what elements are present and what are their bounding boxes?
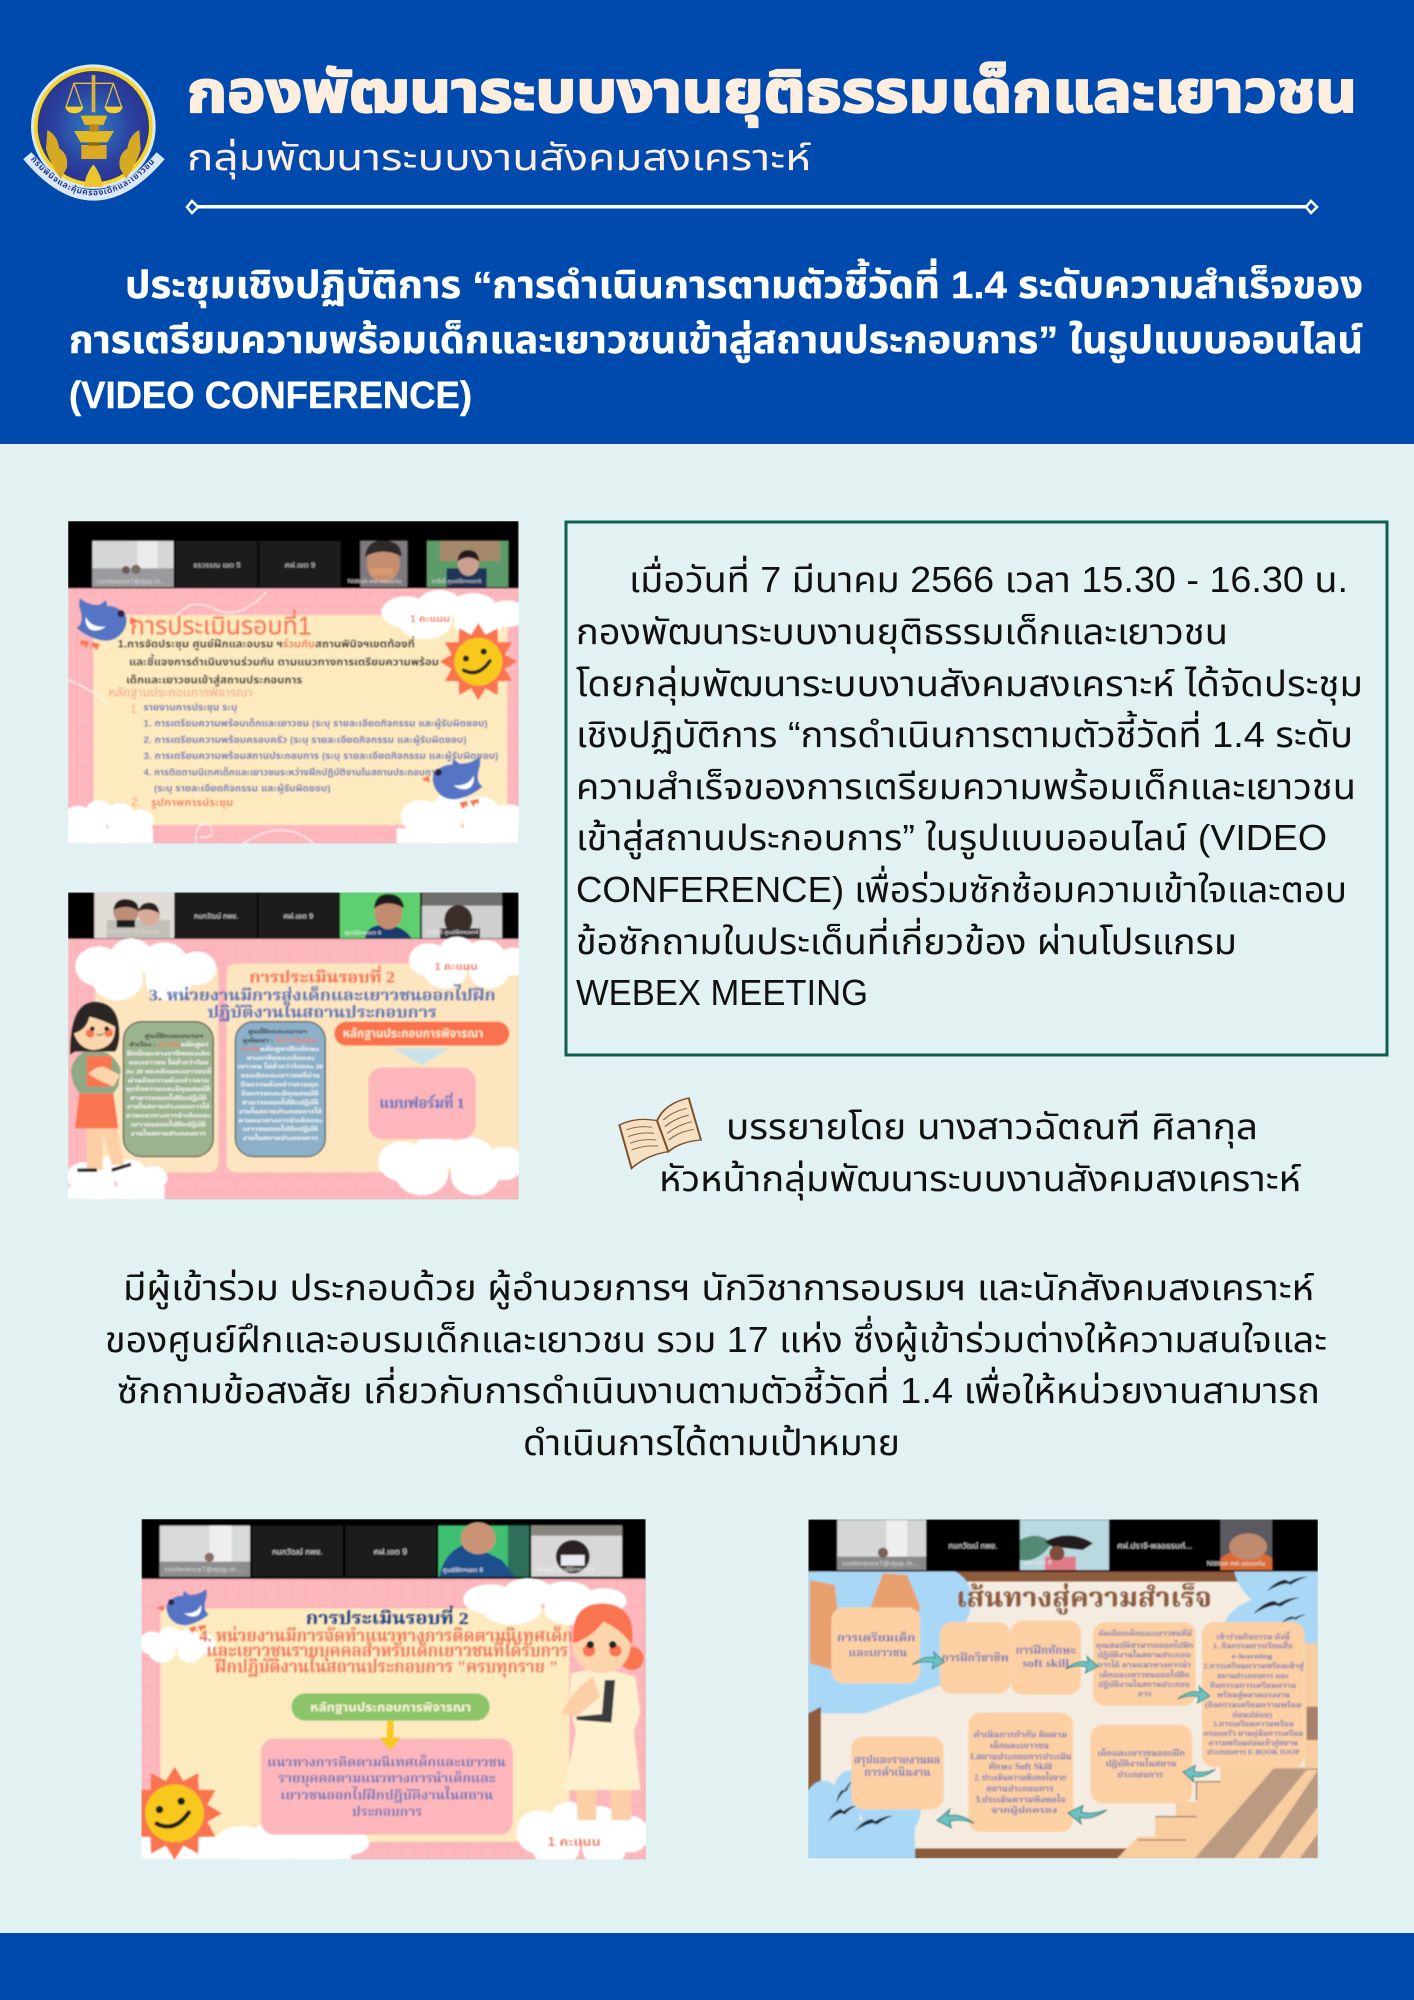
green criteria box bbox=[123, 1022, 213, 1157]
pink guidance box: เยาวชนออกไปฝึกปฏิบัติงานในสถาน bbox=[280, 1784, 493, 1803]
meeting heading: การเตรียมความพร้อมเด็กและเยาวชนเข้าสู่สถานประกอบการ” ในรูปแบบออนไลน์ bbox=[69, 320, 1363, 363]
screenshot: road to success: 3.การเตรียมความพร้อม bbox=[1213, 1720, 1294, 1729]
pink guidance box: แนวทางการติดตามนิเทศเด็กและเยาวชน bbox=[267, 1754, 506, 1770]
slide heading: การประเมินรอบที่ 2 bbox=[306, 1605, 469, 1628]
screenshot: road to success: ก่อนปล่อย) bbox=[1232, 1710, 1273, 1719]
box: meeting description bbox=[566, 522, 1387, 1055]
clouds bbox=[139, 1578, 649, 1869]
green criteria box: ผ่านกิจกรรมดังกล่าวครบ bbox=[128, 1076, 209, 1084]
pink guidance box: รายบุคคลตามแนวทางการนำเด็กและ bbox=[278, 1770, 496, 1787]
slide heading: ปฏิบัติงานในสถานประกอบการ bbox=[207, 1002, 437, 1022]
icon: department seal logo: กรมพินิจและคุ้มครองเด็กและเยาวชน bbox=[30, 157, 154, 196]
screenshot: road to success: เด็กและเยาวชนออกฝึก bbox=[1097, 1748, 1185, 1758]
blue criteria box bbox=[235, 1022, 325, 1157]
green criteria box: ตามแนวทางการนำเด็กและ bbox=[126, 1113, 211, 1120]
blue criteria box: เยาวชนออกไปฝึกปฏิบัติ bbox=[243, 1126, 318, 1133]
screenshot: road to success: 1.สถานประกอบการประเมิน bbox=[970, 1751, 1072, 1761]
video call strip: ศูนย์ฝึกฯเขต 6 bbox=[443, 1567, 484, 1574]
green criteria box: สามารถออกไปฝึกปฏิบัติ bbox=[130, 1095, 207, 1102]
screenshot: road to success: ความพร้อมก่อนเข้าสู่สถาน bbox=[1208, 1739, 1299, 1748]
screenshot: assessment round 2 item 3: 1 คะแนน bbox=[434, 961, 478, 973]
blue criteria box: ทางอาชีพของเด็กและ bbox=[247, 1055, 315, 1062]
green criteria box: งานในสถานประกอบการได้ bbox=[127, 1104, 210, 1111]
participants paragraph: มีผู้เข้าร่วม ประกอบด้วย ผู้อำนวยการฯ นักวิชาการอบรมฯ และนักสังคมสงเคราะห์ bbox=[123, 1267, 1315, 1309]
blue criteria box: ศูนย์ฝึกและอบรมฯ bbox=[248, 1027, 307, 1035]
participants paragraph: ของศูนย์ฝึกและอบรมเด็กและเยาวชน รวม 17 แห่ง ซึ่งผู้เข้าร่วมต่างให้ความสนใจและ bbox=[105, 1315, 1327, 1361]
screenshot: road to success: ดำเนินการกำกับ ติดตาม bbox=[974, 1729, 1067, 1739]
step boxes bbox=[831, 1607, 1305, 1832]
screenshot: road to success: 2.การเตรียมความพร้อมเข้าสู่ bbox=[1203, 1662, 1304, 1671]
meeting heading: (VIDEO CONFERENCE) bbox=[69, 375, 472, 417]
video call strip: ศฝ.ปราจี-พลอธรมก์... bbox=[1117, 1542, 1192, 1551]
slide heading: 3. หน่วยงานมีการส่งเด็กและเยาวชนออกไปฝึก bbox=[149, 985, 496, 1005]
screenshot: assessment round 1: ร่วมกับ bbox=[283, 637, 315, 650]
illustration: girl with book bbox=[70, 1002, 131, 1172]
screenshot: road to success: 1. กิจกรรมการเรียนสื่อ bbox=[1213, 1640, 1293, 1651]
slide background bbox=[68, 939, 519, 1199]
screenshot: road to success: 3.ประเมินความพึงพอใจ bbox=[975, 1793, 1066, 1804]
video call strip: กนกวัฒน์ กพย. bbox=[194, 912, 238, 921]
screenshot: road to success: จากผู้ปกครอง bbox=[991, 1805, 1057, 1816]
step labels: และเยาวชน bbox=[849, 1646, 907, 1660]
speaker credit bbox=[659, 1106, 1302, 1200]
form box: แบบฟอร์มที่ 1 bbox=[379, 1092, 464, 1112]
screenshot: assessment round 2 item 4: 1 คะแนน bbox=[547, 1834, 601, 1849]
box: meeting description: ข้อซักถามในประเด็นที่เกี่ยวข้อง ผ่านโปรแกรม bbox=[576, 917, 1237, 962]
blue criteria box: งานในสถานประกอบการ bbox=[243, 1135, 318, 1142]
illustration: girl with tablet bbox=[561, 1603, 644, 1820]
screenshot: assessment round 1: 4. การติดตามนิเทศเด็กและเยาวชนระหว่างฝึกปฏิบัติงานในสถานประกอบการ bbox=[143, 766, 440, 777]
screenshot: road to success: การ bbox=[1138, 1690, 1152, 1699]
screenshot: road to success: ปฏิบัติงานในสถาน bbox=[1105, 1758, 1177, 1769]
meeting heading: ประชุมเชิงปฏิบัติการ “การดำเนินการตามตัวชี้วัดที่ 1.4 ระดับความสำเร็จของ bbox=[125, 258, 1363, 308]
evidence pill bbox=[292, 1693, 490, 1721]
slide background bbox=[141, 1579, 646, 1859]
screenshot: assessment round 1 bbox=[63, 521, 527, 845]
slide heading bbox=[199, 1605, 573, 1679]
green criteria box: เยาวชนออกไปฝึกปฏิบัติ bbox=[131, 1122, 206, 1129]
evidence pill: หลักฐานประกอบการพิจารณา bbox=[310, 1699, 471, 1714]
birds silhouettes bbox=[828, 1577, 1308, 1832]
box: meeting description: โดยกลุ่มพัฒนาระบบงานสังคมสงเคราะห์ ได้จัดประชุม bbox=[576, 663, 1363, 705]
green criteria box: หลักสูตร bbox=[181, 1042, 209, 1049]
video call strip: Nitittun ศฝ.ขอนแก่น bbox=[1207, 1558, 1266, 1567]
screenshot: road to success: การได้ ตามแนวทางการนำ bbox=[1097, 1661, 1191, 1670]
meeting heading bbox=[69, 258, 1363, 417]
step labels: การฝึกทักษะ bbox=[1016, 1643, 1076, 1657]
blue criteria box: ตามแนวทางการนำเด็กและ bbox=[238, 1117, 322, 1124]
icon: bird left bbox=[77, 598, 138, 651]
step labels bbox=[837, 1631, 1076, 1779]
blue criteria box: ไม่จำเป็นต้อง bbox=[275, 1036, 318, 1044]
icon: bird bbox=[157, 1589, 209, 1634]
screenshot: road to success: ทักษะ Soft Skill bbox=[988, 1762, 1053, 1772]
screenshot: assessment round 1: 1.การจัดประชุม ศูนย์ฝึกและอบรม ฯ bbox=[118, 638, 283, 650]
step labels: การดำเนินงาน bbox=[864, 1765, 931, 1779]
screenshot: assessment round 1: 1. bbox=[131, 702, 138, 716]
green criteria box: ลำเรือง : bbox=[129, 1042, 155, 1049]
slide heading: และเยาวชนรายบุคคลสำหรับเด็กเยาวชนที่ได้รับการ bbox=[206, 1638, 568, 1663]
header band bbox=[0, 0, 1414, 444]
participants paragraph: ซักถามข้อสงสัย เกี่ยวกับการดำเนินงานตามตัวชี้วัดที่ 1.4 เพื่อให้หน่วยงานสามารถ bbox=[117, 1366, 1320, 1411]
header rule with diamond ends bbox=[187, 201, 1317, 213]
blue criteria box: กิจกรรมและมีคุณสมบัติ bbox=[241, 1091, 319, 1098]
video call strip: กนกวัฒน์ กพย. bbox=[272, 1546, 323, 1556]
blue criteria box: หลักสูตรฝึกทักษะ bbox=[260, 1046, 319, 1053]
step labels: สรุปและรายงานผล bbox=[854, 1753, 940, 1767]
video call strip: ธรวรรณ เขต 5 bbox=[193, 560, 241, 569]
screenshot: assessment round 1: (ระบุ รายละเอียดกิจกรรม และผู้รับผิดชอบ) bbox=[154, 783, 331, 793]
footer band bbox=[0, 1933, 1414, 2000]
evidence pill: หลักฐานประกอบการพิจารณา bbox=[343, 1027, 483, 1041]
screenshot: road to success: ประกอบการ bbox=[1117, 1769, 1164, 1779]
screenshot: road to success: e-learning bbox=[1232, 1652, 1272, 1661]
blue criteria box: งานในสถานประกอบการได้ bbox=[239, 1108, 322, 1115]
video call strip bbox=[837, 1520, 1272, 1570]
box: meeting description: WEBEX MEETING bbox=[576, 972, 868, 1013]
slide heading bbox=[149, 965, 496, 1022]
slide heading: 4. หน่วยงานมีการจัดทำแนวทางการติดตามนิเทศเด็ก bbox=[199, 1626, 573, 1646]
box: meeting description: เข้าสู่สถานประกอบการ” ในรูปแบบออนไลน์ (VIDEO bbox=[576, 817, 1327, 859]
slide heading: การประเมินรอบที่ 2 bbox=[249, 965, 395, 986]
video call strip: ศูนย์ฝึกฯเขต 6 bbox=[345, 929, 381, 936]
blue criteria box: ของเด็กและเยาวชนที่ผ่าน bbox=[241, 1071, 320, 1080]
slide background bbox=[808, 1572, 1318, 1858]
step labels: การฝึกวิชาชีพ bbox=[942, 1651, 1009, 1664]
screenshot: assessment round 1: และชี้แจงการดำเนินงานร่วมกัน ตามแนวทางการเตรียมความพร้อม bbox=[129, 654, 439, 669]
subtitle: กลุ่มพัฒนาระบบงานสังคมสงเคราะห์ bbox=[187, 137, 811, 180]
screenshot: road to success bbox=[804, 1519, 1318, 1858]
video call strip: ศฝ.เขต 9 bbox=[1024, 1560, 1052, 1567]
video call strip: ไพจิตรี ศูนย์ฝึกฯเขต4 bbox=[536, 1566, 595, 1573]
pink guidance box: ประกอบการ bbox=[352, 1804, 422, 1819]
pink guidance box bbox=[261, 1739, 513, 1835]
green criteria box: ศูนย์ฝึกและอบรมฯ bbox=[145, 1032, 203, 1040]
screenshot: road to success: ปฏิบัติงานในสถานประกอบ bbox=[1097, 1651, 1191, 1660]
slide text bbox=[130, 608, 450, 636]
slide title: เส้นทางสู่ความสำเร็จ bbox=[956, 1583, 1212, 1616]
screenshot: assessment round 1: รูปภาพการประชุม bbox=[151, 797, 233, 809]
video call strip: conference7@djop.m... bbox=[842, 1561, 919, 1568]
screenshot: assessment round 2 item 4 bbox=[127, 1519, 649, 1869]
screenshot: road to success: ครอบครัว ตามคู่มือการเตรียม bbox=[1203, 1729, 1303, 1738]
green criteria box: ฝึกทักษะทางอาชีพของเด็ก bbox=[125, 1051, 210, 1058]
screenshot: road to success: สถานประกอบการ และ bbox=[1217, 1671, 1289, 1680]
blue criteria box: กิจกรรมดังกล่าวครบทุก bbox=[240, 1081, 319, 1089]
screenshot: road to success: เด็กและเยาวชน bbox=[990, 1740, 1049, 1750]
step labels: การเตรียมเด็ก bbox=[837, 1631, 915, 1645]
screenshot: road to success: เด็กและเยาวชนออกไปฝึก bbox=[1099, 1670, 1190, 1679]
screenshot: road to success: 2. ประเมินความพึงพอใจจาก bbox=[974, 1772, 1067, 1783]
screenshot: road to success: กิจกรรมการเตรียมความ bbox=[1210, 1681, 1296, 1690]
screenshot: assessment round 1: 3. การเตรียมความพร้อมสถานประกอบการ (ระบุ รายละเอียดกิจกรรม และผู้รับผิดชอบ) bbox=[143, 751, 498, 761]
screenshot: road to success: เข้าร่วมกิจกรรม ดังนี้ bbox=[1216, 1630, 1291, 1641]
screenshot: assessment round 1: 2. bbox=[131, 795, 141, 809]
slide text: 1 คะแนน bbox=[410, 614, 450, 625]
screenshot: assessment round 1: รายงานการประชุม ระบุ bbox=[143, 703, 237, 713]
icon: open book bbox=[619, 1098, 701, 1168]
screenshot: road to success: คัดเลือกเด็กและเยาวชนที่มี bbox=[1098, 1627, 1192, 1638]
screenshot: assessment round 1: หลักฐานประกอบการพิจารณา bbox=[108, 686, 253, 700]
green criteria box: ตรงต่อ bbox=[157, 1041, 181, 1049]
participants paragraph: ดำเนินการได้ตามเป้าหมาย bbox=[523, 1422, 900, 1463]
screenshot: road to success: ปฏิบัติงานในสถานประกอบ bbox=[1098, 1680, 1190, 1689]
icon: bird right bbox=[421, 757, 483, 809]
screenshot: road to success: (กิจกรรมเตรียมความพร้อม bbox=[1205, 1701, 1301, 1710]
speaker credit: หัวหน้ากลุ่มพัฒนาระบบงานสังคมสงเคราะห์ bbox=[659, 1158, 1302, 1200]
flow arrows bbox=[912, 1652, 1215, 1828]
video call strip: ไพจิตรี ศูนย์ฝึกฯเขต4 bbox=[426, 929, 478, 936]
green criteria box: และเยาวชน ไม่ต่ำกว่าร้อย bbox=[129, 1058, 209, 1067]
evidence pill bbox=[334, 1022, 509, 1046]
screenshot: road to success: ประกอบการ E-BOOK DJOP bbox=[1207, 1748, 1300, 1757]
form box bbox=[368, 1068, 476, 1139]
box: meeting description: CONFERENCE) เพื่อร่วมซักซ้อมความเข้าใจและตอบ bbox=[576, 865, 1347, 910]
blue criteria box: สามารถออกไปฝึกปฏิบัติ bbox=[242, 1099, 319, 1106]
box: meeting description: กองพัฒนาระบบงานยุติธรรมเด็กและเยาวชน bbox=[576, 611, 1228, 653]
video call strip bbox=[94, 892, 502, 938]
green criteria box: ทุกกิจกรรมและมีคุณสมบัติ bbox=[126, 1086, 211, 1093]
slide background bbox=[68, 588, 519, 843]
icon: sun bbox=[440, 623, 517, 700]
video call strip: ธารีณี ศูนย์ฝึกฯเขต6 bbox=[432, 578, 482, 585]
blue criteria box: ตรงต่อ bbox=[241, 1045, 260, 1053]
video call strip: conference7@djop.m... bbox=[164, 1567, 242, 1574]
video call strip: ศฝ.เขต 9 bbox=[283, 912, 313, 921]
box: meeting description: เมื่อวันที่ 7 มีนาคม 2566 เวลา 15.30 - 16.30 น. bbox=[629, 555, 1348, 600]
screenshot: road to success: สถานประกอบการ bbox=[986, 1783, 1054, 1793]
title: กองพัฒนาระบบงานยุติธรรมเด็กและเยาวชน bbox=[187, 60, 1357, 127]
arrow: down bbox=[379, 1721, 401, 1751]
screenshot: assessment round 1: 2. การเตรียมความพร้อมครอบครัว (ระบุ รายละเอียดกิจกรรม และผู้รับผิดชอบ) bbox=[143, 735, 467, 745]
video call strip: conference7@djop.m... bbox=[97, 579, 166, 585]
speaker credit: บรรยายโดย นางสาวฉัตณฑี ศิลากุล bbox=[726, 1106, 1258, 1148]
icon: department seal logo bbox=[23, 64, 165, 201]
green criteria box: ละ 20 ของเด็กและเยาวชนที่ bbox=[126, 1066, 211, 1075]
screenshot: assessment round 1: สถานพินิจฯเขตท้องที่ bbox=[315, 635, 415, 650]
participants paragraph bbox=[105, 1267, 1327, 1463]
video call strip: conference7@djop.m... bbox=[99, 930, 164, 936]
blue criteria box: ดูพัฒนา : bbox=[243, 1037, 273, 1044]
screenshot: road to success: คุณสมบัติสามารถออกไปฝึก bbox=[1096, 1641, 1194, 1651]
video call strip: Nitittun ศฝ.ขอนแก่น bbox=[348, 578, 402, 585]
video call strip bbox=[160, 1522, 622, 1577]
step labels: soft skill bbox=[1022, 1656, 1070, 1670]
screenshot: assessment round 1: 1. การเตรียมความพร้อมเด็กและเยาวชน (ระบุ รายละเอียดกิจกรรม และผู้รับผิดชอบ) bbox=[143, 719, 488, 729]
box: meeting description: เชิงปฏิบัติการ “การดำเนินการตามตัวชี้วัดที่ 1.4 ระดับ bbox=[576, 710, 1353, 755]
video call strip bbox=[92, 541, 508, 587]
icon: sun bbox=[142, 1766, 222, 1860]
slide text: การประเมินรอบที่1 bbox=[130, 610, 312, 641]
screenshot: assessment round 1: เด็กและเยาวชนเข้าสู่สถานประกอบการ bbox=[126, 673, 303, 686]
box: meeting description: ความสำเร็จของการเตรียมความพร้อมเด็กและเยาวชน bbox=[576, 766, 1356, 807]
screenshot: assessment round 2 item 3 bbox=[67, 892, 530, 1201]
slide heading: ฝึกปฏิบัติงานในสถานประกอบการ "ครบทุกราย " bbox=[215, 1655, 558, 1679]
video call strip: ศฝ.เขต 9 bbox=[285, 560, 315, 569]
video call strip: กนกวัฒน์ กพย. bbox=[948, 1542, 997, 1551]
clouds bbox=[63, 590, 527, 845]
blue criteria box: เยาวชน ไม่ต่ำกว่าร้อยละ 20 bbox=[238, 1062, 323, 1071]
clouds bbox=[67, 937, 530, 1201]
video call strip: ศฝ.เขต 9 bbox=[373, 1547, 408, 1556]
screenshot: road to success: พร้อมสู่ตลาดแรงงาน bbox=[1217, 1691, 1291, 1700]
pyramid steps bbox=[1117, 1643, 1318, 1858]
green criteria box: งานในสถานประกอบการ bbox=[131, 1130, 206, 1137]
